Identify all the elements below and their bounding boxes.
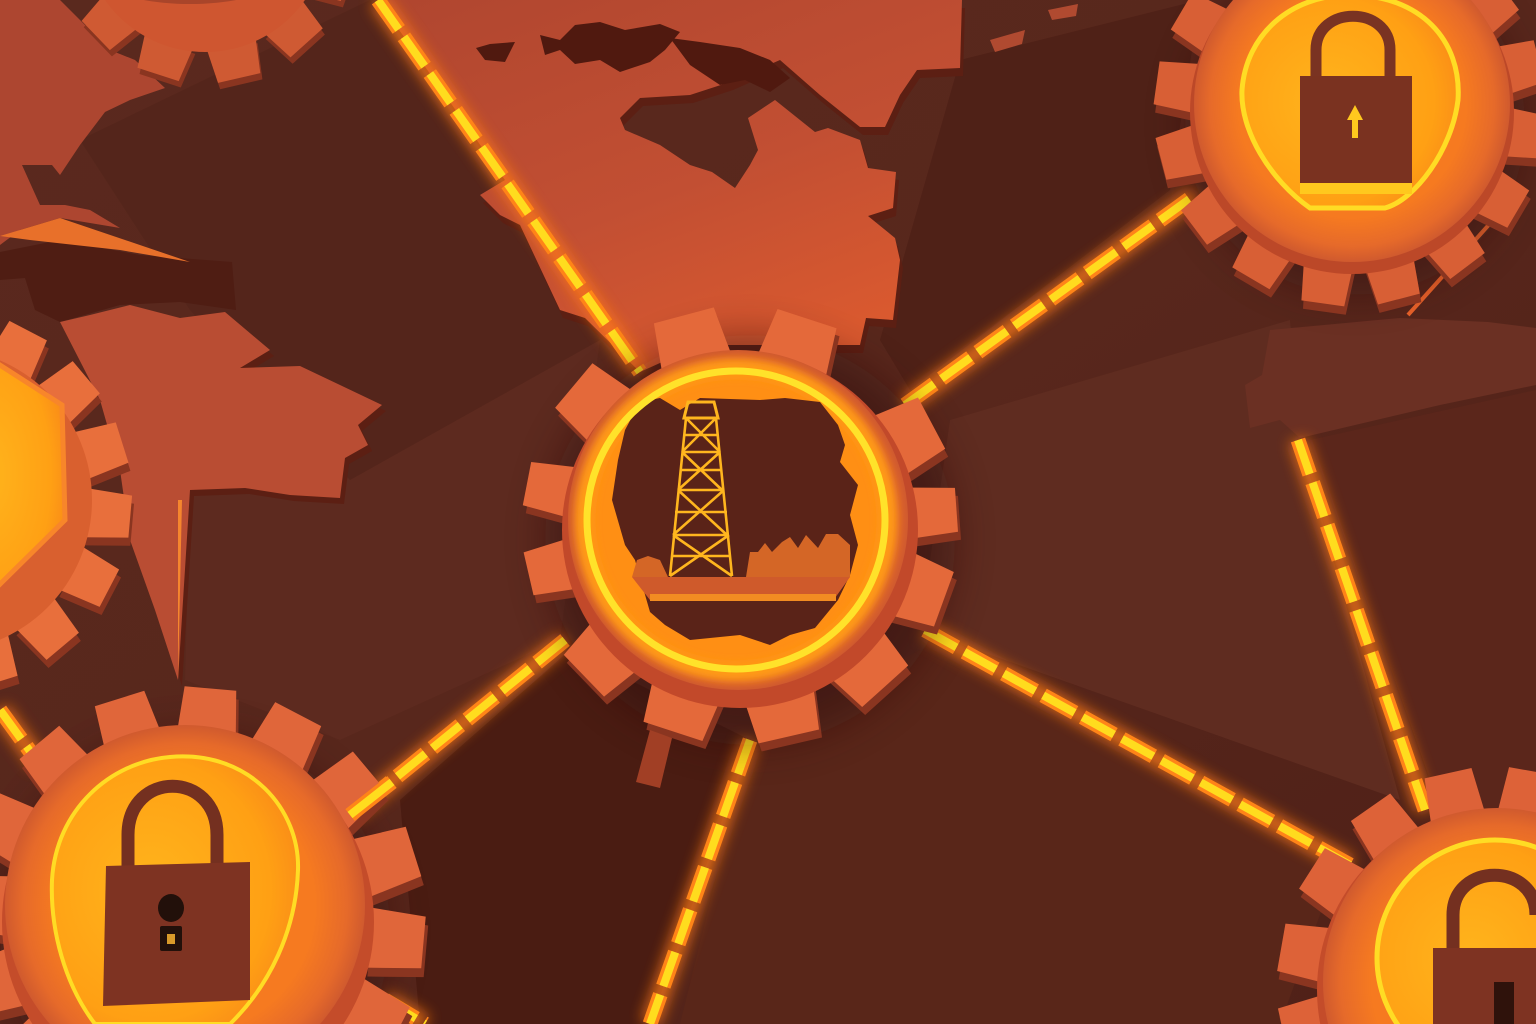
gear teeth: [0, 293, 150, 715]
padlock shackle: [1316, 16, 1390, 80]
keyhole: [158, 894, 184, 951]
padlock shackle: [1453, 875, 1536, 950]
land: right dark landmass: [1245, 318, 1536, 438]
gear: bottom-left padlock: [0, 668, 447, 1024]
yellow disc: [1242, 0, 1458, 208]
gear teeth: [0, 668, 447, 1024]
dark inner disc: [612, 398, 858, 645]
land: small islands top right: [990, 4, 1078, 52]
skyline: [632, 534, 850, 577]
padlock body: [1433, 948, 1536, 1024]
padlock body: [103, 862, 250, 1006]
gear teeth: [52, 0, 360, 90]
stray tooth below central gear: [636, 730, 672, 788]
land: left continent: [60, 305, 386, 686]
keyhole arrow: [1347, 105, 1363, 138]
connector end over bottom-left gear: [350, 782, 392, 815]
gear: left hexagon: [0, 293, 150, 715]
gear: bottom-right padlock: [1242, 734, 1536, 1024]
gear teeth: [1128, 0, 1536, 339]
padlock body: [1300, 76, 1412, 183]
oil derrick: [670, 402, 732, 576]
land: dark mid-left landmass: [0, 218, 236, 322]
yellow disc: [1377, 840, 1536, 1024]
gear: central oil derrick hub: [522, 306, 961, 753]
padlock shackle: [128, 786, 217, 870]
keyhole: [1494, 982, 1514, 1024]
diagonal thin orange line top right: [1408, 190, 1520, 315]
land: top-left landmass: [0, 0, 165, 245]
land: inner lakes: [476, 22, 790, 92]
gear: top-left partial: [52, 0, 360, 90]
platform: [632, 577, 850, 600]
land: top-centre continent: [378, 0, 965, 380]
gear: top-right padlock: [1128, 0, 1536, 339]
yellow disc: [52, 756, 298, 1024]
gear teeth: [1242, 734, 1536, 1024]
gear teeth: [522, 306, 961, 753]
